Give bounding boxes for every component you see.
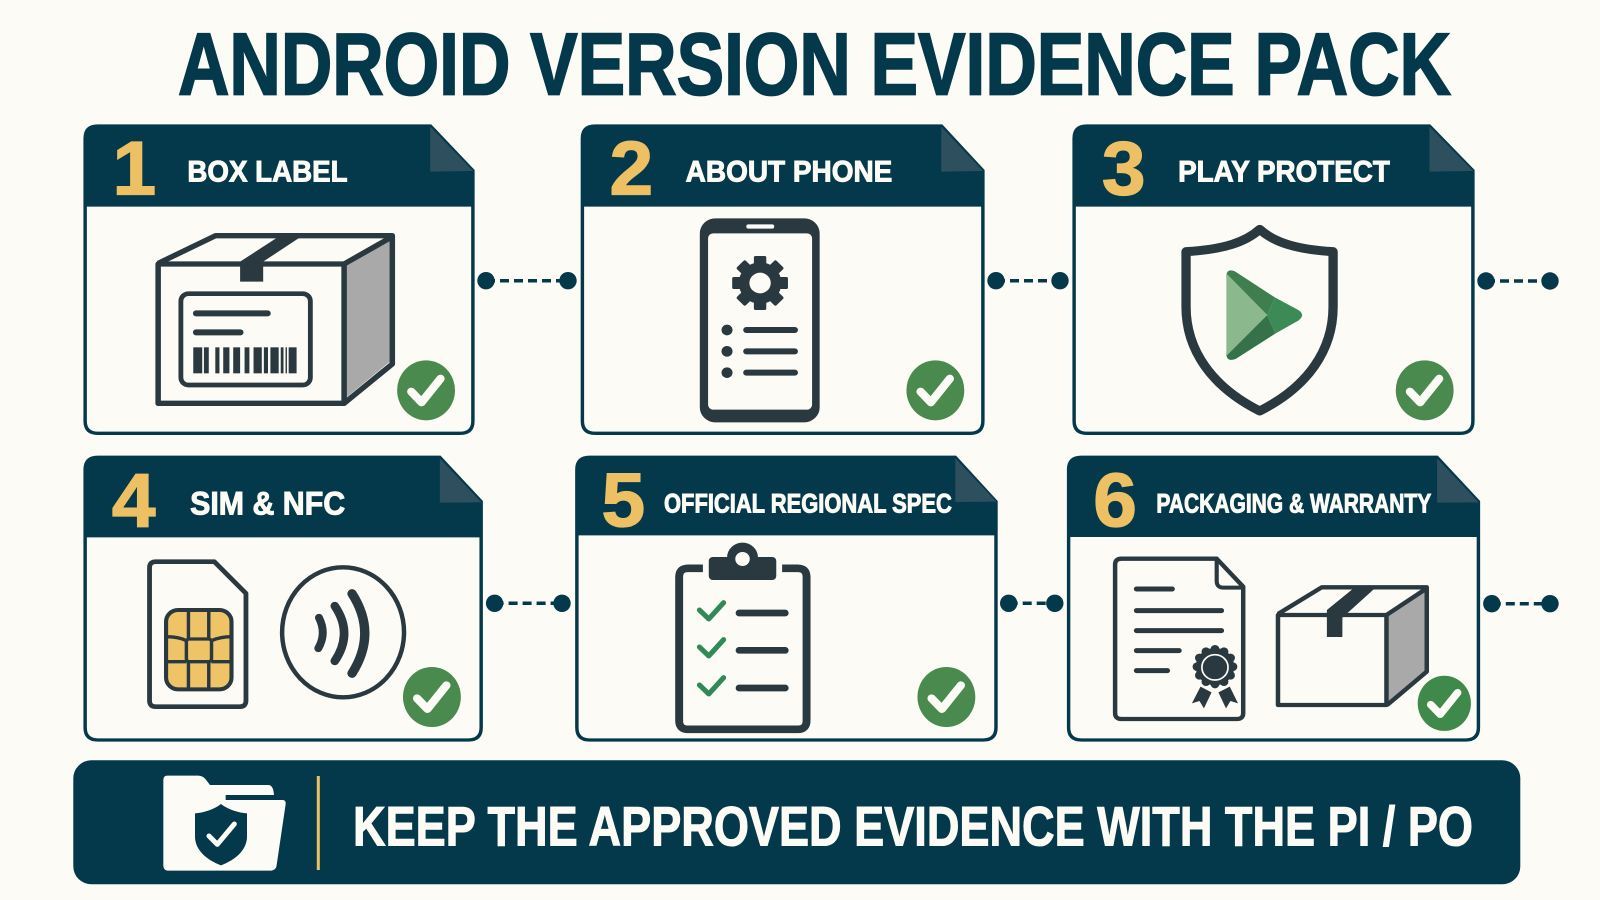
- icon: verified badge: [403, 667, 461, 727]
- heading: packaging and warranty: PACKAGING & WARRANTY: [1156, 488, 1431, 519]
- number 4: 4: [112, 458, 156, 543]
- icon: folder with shield: [163, 776, 286, 871]
- icon: sim card: [150, 562, 246, 707]
- icon: clipboard checklist: [679, 543, 807, 729]
- icon: verified badge: [1418, 676, 1471, 731]
- arrow: connector 1 to 2: [477, 272, 577, 289]
- number 1: 1: [113, 127, 156, 211]
- icon: verified badge: [1396, 360, 1454, 420]
- panel: 6 packaging and warranty: [1067, 456, 1480, 742]
- panel: 5 official regional spec: [575, 456, 998, 742]
- panel: 4 sim and nfc: [83, 456, 483, 742]
- icon: phone settings: [700, 218, 820, 422]
- panel: 3 play protect: [1072, 124, 1475, 435]
- heading: sim and nfc: SIM & NFC: [190, 486, 345, 521]
- number 5: 5: [602, 458, 645, 543]
- number 6: 6: [1093, 458, 1137, 543]
- arrow: connector 4 to 5: [486, 595, 571, 612]
- number 2: 2: [609, 127, 653, 211]
- heading: play protect: PLAY PROTECT: [1178, 155, 1390, 189]
- arrow: connector 2 to 3: [987, 272, 1069, 289]
- panel: bottom banner: [73, 760, 1520, 884]
- icon: verified badge: [917, 667, 975, 727]
- arrow: connector after 3: [1477, 272, 1559, 290]
- number 3: 3: [1102, 127, 1146, 211]
- icon: packaging box: [1278, 587, 1427, 705]
- heading: about phone: ABOUT PHONE: [686, 155, 892, 189]
- icon: warranty document: [1115, 559, 1243, 719]
- arrow: connector 5 to 6: [1000, 595, 1064, 612]
- heading: box label: BOX LABEL: [187, 155, 348, 189]
- icon: labelled box: [158, 236, 392, 403]
- icon: verified badge: [906, 360, 964, 420]
- panel: 2 about phone: [581, 124, 985, 435]
- icon: verified badge: [397, 360, 455, 420]
- arrow: connector after 6: [1483, 595, 1559, 612]
- icon: shield with play triangle: [1186, 229, 1333, 411]
- icon: nfc symbol: [282, 567, 404, 697]
- heading: official regional spec: OFFICIAL REGIONAL SPEC: [664, 488, 952, 519]
- divider line: [317, 776, 320, 870]
- panel: 1 box label: [83, 124, 475, 435]
